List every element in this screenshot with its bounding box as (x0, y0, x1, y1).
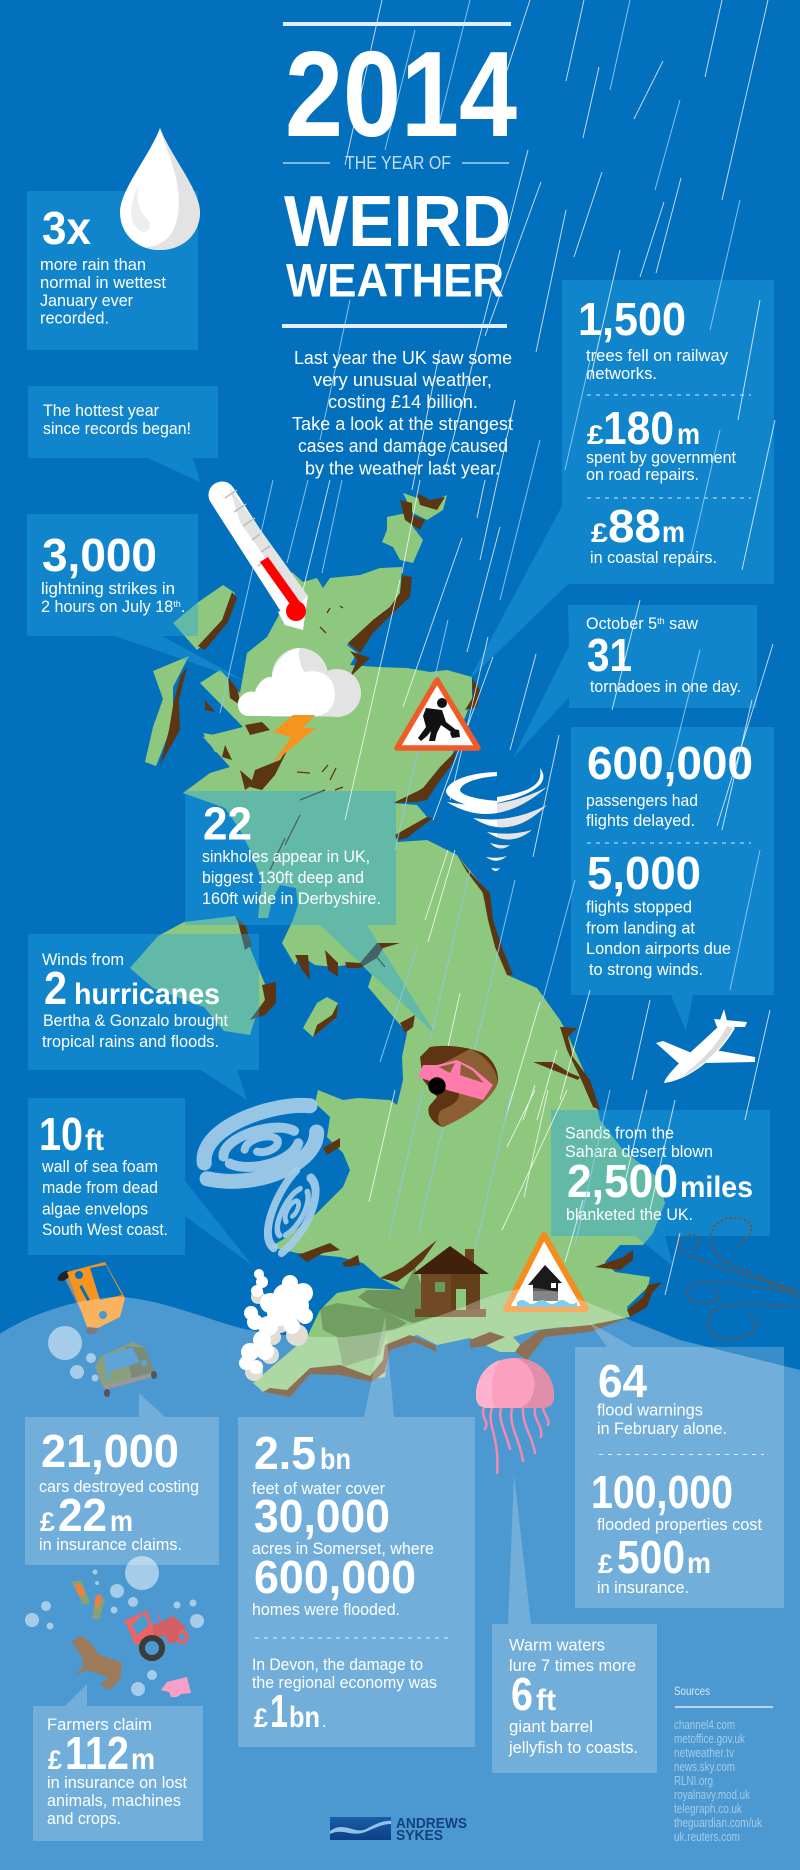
Somerset flood area, southern part (320, 1303, 407, 1367)
water text: feet of water cover (252, 1480, 386, 1498)
panel: farmers (33, 1684, 203, 1841)
stat: 2.5bn (254, 1427, 351, 1479)
stat: 6ft: ft (536, 1684, 556, 1717)
rain streaks (220, 0, 775, 1295)
inland rivers and lochs (270, 606, 385, 967)
stat: 2 hurricanes (44, 962, 220, 1014)
stat: 3,000: 3,000 (42, 529, 157, 581)
sea foam text (41, 1158, 168, 1239)
flights stopped text: to strong winds. (589, 961, 703, 979)
sinkholes text: biggest 130ft deep and (202, 869, 364, 887)
stat: 2,500 miles: miles (680, 1171, 753, 1204)
icon: red tractor (122, 1610, 187, 1658)
icon: sinkhole with pink car (418, 1046, 498, 1127)
intro paragraph (292, 348, 513, 478)
flood warnings text (597, 1402, 727, 1438)
icon: cow (72, 1636, 122, 1690)
intro paragraph: costing £14 billion. (328, 392, 478, 412)
stat: £1bn: bn (289, 1701, 320, 1734)
stat: £180m: £ (587, 420, 604, 450)
road repairs text: on road repairs. (586, 466, 699, 484)
stat: £88m: 88 (608, 500, 661, 552)
eroded brown coastlines (160, 493, 662, 1397)
tornadoes text: tornadoes in one day. (590, 678, 741, 696)
stat: 100,000: 100,000 (591, 1466, 733, 1518)
stat: £112m: 112 (65, 1727, 129, 1779)
stat: 600,000 homes: 600,000 (254, 1551, 416, 1603)
icon: jellyfish (476, 1358, 554, 1473)
icon: hurricane swirl, large (197, 1102, 323, 1187)
panel: hottest year (28, 386, 218, 482)
icon: house (413, 1246, 489, 1317)
panel: hurricanes (28, 934, 259, 1100)
Scottish islands (145, 493, 447, 766)
Sahara text: Sands from the (565, 1125, 674, 1143)
stat: £112m: £ (48, 1745, 62, 1775)
insurance on lost animals text (47, 1774, 187, 1828)
lightning text: lightning strikes in (41, 580, 175, 598)
barrel jellyfish text (508, 1718, 638, 1757)
stat: £1bn: 1 (270, 1685, 288, 1737)
logo wordmark (396, 1816, 467, 1844)
panel: sea foam (28, 1098, 252, 1265)
farmers text: Farmers claim (47, 1716, 152, 1734)
passengers text: passengers had (586, 792, 698, 810)
trees text: networks. (586, 365, 657, 383)
rain text: more rain than (40, 256, 146, 274)
stat: 2 hurricanes: hurricanes (74, 978, 220, 1011)
stat: 2.5bn: bn (320, 1443, 351, 1476)
panel: tornadoes (513, 605, 757, 758)
rain text: January ever (40, 292, 134, 310)
icon: water drop (120, 128, 200, 250)
passengers text (586, 792, 698, 830)
insurance on lost animals text: animals, machines (47, 1792, 181, 1810)
sources list: uk.reuters.com (674, 1830, 740, 1844)
water overlay (0, 1288, 800, 1870)
panel: 3x more rain (27, 191, 198, 350)
stat: £88m: m (662, 516, 685, 549)
icon: sea foam plume (239, 1269, 313, 1381)
logo wordmark: ANDREWS (396, 1816, 467, 1832)
coastal repairs text: in coastal repairs. (590, 549, 717, 567)
stat: £1bn: . (322, 1713, 326, 1731)
lightning text: . (181, 598, 185, 616)
stat: £500m: 500 (617, 1531, 685, 1583)
intro paragraph: very unusual weather, (313, 370, 492, 390)
cars text: cars destroyed costing (39, 1478, 199, 1496)
passengers text: flights delayed. (586, 812, 695, 830)
logo: Andrews Sykes (330, 1816, 467, 1844)
flights stopped text (586, 898, 731, 979)
sources (674, 1684, 773, 1844)
sea foam text: South West coast. (42, 1221, 168, 1239)
sinkholes text: 160ft wide in Derbyshire. (202, 890, 381, 908)
Sahara text: Sahara desert blown (565, 1143, 713, 1161)
hottest year text: since records began! (43, 420, 191, 438)
insurance on lost animals text: and crops. (47, 1810, 121, 1828)
panel: trees, road and coastal repairs (469, 280, 774, 680)
homes text: homes were flooded. (252, 1601, 400, 1619)
sources list: metoffice.gov.uk (674, 1732, 746, 1746)
stat: 6ft: 6 (511, 1668, 533, 1720)
intro paragraph: by the weather last year. (305, 458, 500, 478)
stat: 5,000: 5,000 (587, 847, 701, 899)
hottest year text: The hottest year (43, 402, 160, 420)
sources list (674, 1718, 763, 1844)
icon: orange van (56, 1262, 125, 1336)
icon: aeroplane (656, 1009, 755, 1083)
stat: £22m: £ (40, 1507, 55, 1537)
Northern Ireland (130, 916, 270, 1035)
flooded properties text: flooded properties cost (597, 1516, 762, 1534)
panel: Somerset and Devon floods (238, 1316, 475, 1747)
sea foam text: made from dead (42, 1179, 158, 1197)
lightning text: 2 hours on July 18 (41, 598, 173, 616)
icon: thermometer (222, 486, 308, 630)
stat: £500m: £ (598, 1549, 613, 1579)
subtitle: the year of: THE YEAR OF (345, 153, 451, 173)
sources list: telegraph.co.uk (674, 1802, 743, 1816)
Somerset flood area (358, 1267, 433, 1323)
Bertha and Gonzalo text: tropical rains and floods. (42, 1033, 219, 1051)
flood warnings text: in February alone. (597, 1420, 727, 1438)
October text: saw (665, 615, 698, 633)
sources list: netweather.tv (674, 1746, 735, 1760)
insurance claims text: in insurance claims. (39, 1536, 182, 1554)
stat: 21,000: 21,000 (41, 1425, 179, 1477)
stat: £88m: £ (591, 518, 608, 548)
stat: £500m: m (687, 1547, 711, 1580)
sources list: RLNI.org (674, 1774, 713, 1788)
lightning text (41, 580, 185, 616)
panel: Sahara sands (551, 1110, 770, 1266)
title: weird: WEIRD (284, 182, 511, 262)
barrel jellyfish text: giant barrel (509, 1718, 593, 1736)
stat: £22m: 22 (58, 1489, 107, 1541)
lightning text: th (173, 599, 181, 609)
rain text (40, 256, 167, 328)
icon: pig (161, 1677, 191, 1697)
icon: bubbles around farm (25, 1556, 204, 1696)
sea foam text: algae envelops (42, 1200, 148, 1218)
map of the UK (130, 493, 665, 1397)
sources list: theguardian.com/uk (674, 1816, 763, 1830)
icon: bubbles near cars (48, 1326, 98, 1382)
road repairs text (586, 449, 736, 484)
Devon text: the regional economy was (252, 1674, 437, 1692)
stat: 10ft: ft (85, 1124, 104, 1157)
stat: £22m (40, 1489, 133, 1541)
panel: lightning strikes (27, 514, 245, 681)
sinkholes text (202, 848, 381, 908)
panel: cars destroyed (25, 1393, 219, 1565)
icon: lightning bolt (273, 715, 316, 763)
flights stopped text: flights stopped (586, 898, 692, 916)
icon: tornado (446, 768, 547, 871)
flights stopped text: from landing at (586, 920, 696, 938)
icon: green car (95, 1342, 157, 1397)
stat: 2 hurricanes: 2 (44, 962, 67, 1014)
stat: £1bn: £ (254, 1703, 268, 1733)
title: weather: WEATHER (286, 254, 504, 306)
logo wordmark: SYKES (396, 1828, 443, 1844)
barrel jellyfish text: jellyfish to coasts. (508, 1739, 638, 1757)
panel: jellyfish (492, 1475, 657, 1773)
Sahara text (565, 1125, 713, 1161)
icon: corn cobs (74, 1582, 103, 1618)
sources heading: Sources (674, 1684, 710, 1698)
stat: £22m: m (110, 1505, 133, 1538)
icon: flood warning sign (506, 1235, 586, 1309)
mainland Great Britain (183, 567, 665, 1397)
road repairs text: spent by government (586, 449, 736, 467)
stat: 2,500 miles (567, 1155, 753, 1207)
stat: £112m (48, 1727, 155, 1779)
stat: 31: 31 (587, 629, 632, 681)
icon: hurricane swirl, small (254, 1168, 328, 1256)
sinkholes text: sinkholes appear in UK, (202, 848, 370, 866)
trees text (586, 347, 729, 383)
stat: 6ft (511, 1668, 556, 1720)
rain text: normal in wettest (40, 274, 167, 292)
stat: 22: 22 (203, 798, 252, 850)
Bertha and Gonzalo text: Bertha & Gonzalo brought (43, 1012, 228, 1030)
acres text: acres in Somerset, where (252, 1540, 434, 1558)
stat: £1bn (254, 1685, 326, 1737)
flights stopped text: London airports due (586, 940, 731, 958)
October text: th (657, 616, 665, 626)
icon: sand trail (679, 1218, 797, 1340)
warm waters text: lure 7 times more (509, 1657, 636, 1675)
insurance on lost animals text: in insurance on lost (47, 1774, 187, 1792)
stat: £500m (598, 1531, 711, 1583)
intro paragraph: cases and damage caused (298, 436, 508, 456)
winds text: Winds from (42, 951, 124, 969)
stat: £112m: m (131, 1743, 155, 1776)
stat: £180m: 180 (603, 402, 674, 454)
blanketed text: blanketed the UK. (566, 1206, 693, 1224)
intro paragraph: Take a look at the strangest (292, 414, 513, 434)
stat: 30,000: 30,000 (254, 1490, 390, 1542)
panel: flights (571, 727, 774, 1031)
stat: 3x: 3x (42, 202, 91, 254)
stat: 1,500: 1,500 (578, 293, 686, 345)
flood warnings text: flood warnings (597, 1402, 703, 1420)
intro paragraph: Last year the UK saw some (294, 348, 512, 368)
title block (282, 22, 517, 328)
stat: £180m (587, 402, 700, 454)
sources list: royalnavy.mod.uk (674, 1788, 751, 1802)
stat: 2.5bn: 2.5 (254, 1427, 316, 1479)
warm waters text (509, 1636, 636, 1675)
Bertha and Gonzalo text (42, 1012, 228, 1051)
warm waters text: Warm waters (509, 1636, 605, 1654)
October text: October 5 (586, 615, 657, 633)
stat: £88m (591, 500, 685, 552)
icon: road works sign (397, 680, 478, 748)
icon: storm cloud (238, 648, 361, 717)
stat: 10ft: 10 (39, 1108, 83, 1160)
panel: flood warnings (575, 1322, 784, 1608)
rain text: recorded. (40, 310, 109, 328)
insurance text: in insurance. (597, 1579, 689, 1597)
sources list: channel4.com (674, 1718, 735, 1732)
stat: 2,500 miles: 2,500 (567, 1155, 678, 1207)
stat: £180m: m (677, 418, 700, 451)
trees text: trees fell on railway (586, 347, 729, 365)
sources list: news.sky.com (674, 1760, 735, 1774)
stat: 600,000: 600,000 (587, 737, 753, 789)
Devon text (252, 1656, 437, 1692)
Isle of Man (303, 997, 338, 1037)
title: 2014: 2014 (285, 26, 517, 162)
hottest year text (43, 402, 191, 438)
sea foam text: wall of sea foam (41, 1158, 158, 1176)
stat: 64: 64 (598, 1355, 647, 1407)
panel: sinkholes (185, 791, 436, 1035)
Devon text: In Devon, the damage to (252, 1656, 423, 1674)
